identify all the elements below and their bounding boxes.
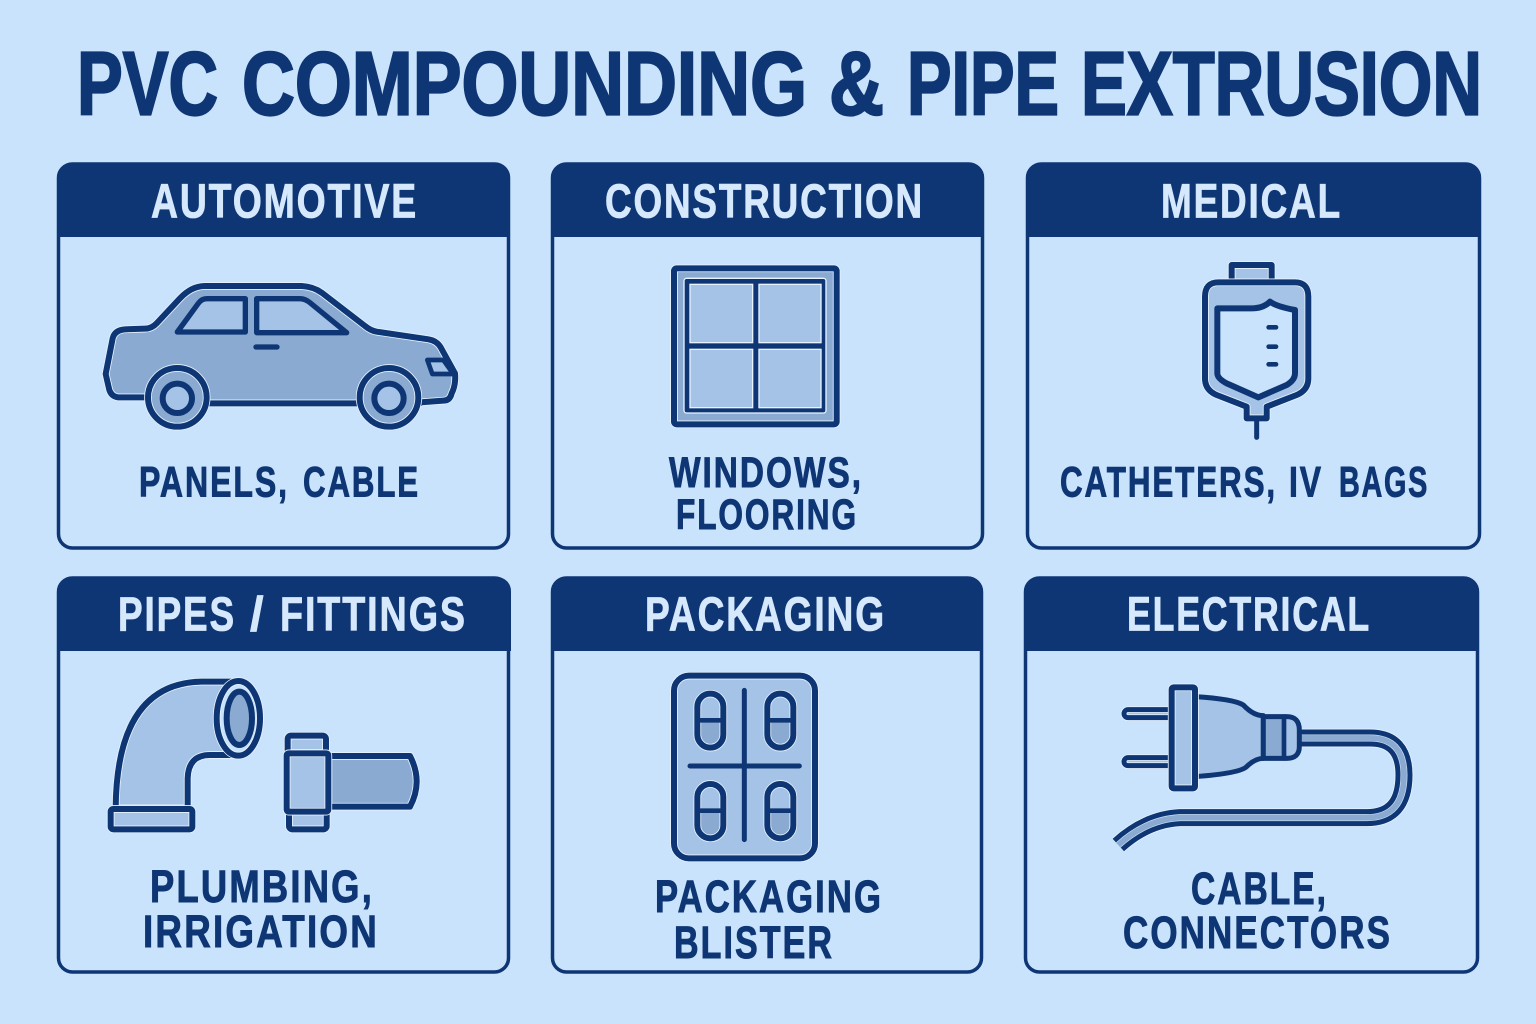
panel: medical	[1026, 163, 1481, 548]
panel frame	[58, 578, 508, 972]
heading bar	[57, 163, 510, 237]
label: BAGS	[1339, 458, 1429, 506]
panel frame	[552, 164, 982, 548]
panel: pipes / fittings	[57, 577, 511, 972]
heading bar	[1026, 163, 1481, 237]
label: CATHETERS,	[1060, 458, 1277, 506]
icon: blister pack	[674, 676, 815, 858]
label line 2: FLOORING	[676, 491, 858, 539]
heading bar	[1024, 577, 1479, 651]
title: &	[829, 34, 884, 134]
label: PANELS,	[139, 458, 289, 506]
panel frame	[1026, 578, 1478, 972]
title: PIPE	[907, 34, 1059, 134]
heading bar	[551, 163, 984, 237]
title: PVC	[77, 34, 218, 134]
heading: PACKAGING	[645, 588, 886, 642]
label: PACKAGING	[655, 871, 883, 922]
panel frame	[58, 164, 508, 548]
panel: automotive	[57, 163, 510, 548]
heading: AUTOMOTIVE	[151, 176, 418, 228]
icon: plug and cable	[1118, 687, 1404, 845]
label: PLUMBING,	[150, 861, 374, 912]
label line 2: IRRIGATION	[143, 906, 379, 957]
panel frame	[552, 578, 982, 972]
label: WINDOWS,	[669, 449, 863, 497]
heading: PIPES	[118, 588, 236, 642]
label: CABLE,	[1191, 863, 1328, 914]
title: COMPOUNDING	[242, 34, 807, 134]
panel: electrical	[1024, 577, 1479, 972]
panel: packaging	[551, 577, 983, 972]
title	[77, 34, 1482, 134]
heading: FITTINGS	[280, 588, 467, 642]
heading: CONSTRUCTION	[605, 176, 924, 228]
label: IV	[1289, 458, 1323, 506]
heading bar	[57, 577, 511, 651]
heading: ELECTRICAL	[1127, 588, 1371, 642]
panel: construction	[551, 163, 984, 548]
icon: car	[106, 286, 455, 427]
icon: IV bag	[1205, 265, 1308, 437]
label line 2: CONNECTORS	[1123, 907, 1392, 958]
heading bar	[551, 577, 983, 651]
heading	[118, 588, 467, 642]
label: CABLE	[303, 458, 420, 506]
heading: MEDICAL	[1161, 176, 1342, 228]
icon: window	[674, 268, 837, 424]
label line 2: BLISTER	[674, 917, 834, 968]
panel frame	[1028, 164, 1480, 548]
heading: /	[250, 588, 266, 642]
icon: pipe elbow and coupling	[111, 681, 417, 829]
